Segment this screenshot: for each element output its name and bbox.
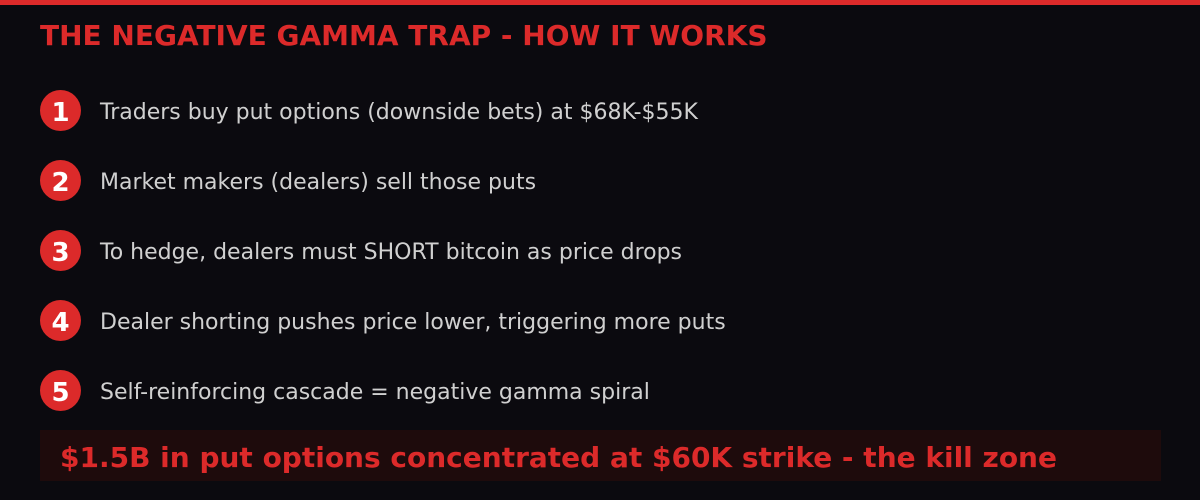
callout bbox=[40, 430, 1161, 481]
step 4: 4 bbox=[51, 308, 70, 338]
step 2 bbox=[40, 160, 536, 201]
title: THE NEGATIVE GAMMA TRAP - HOW IT WORKS bbox=[40, 19, 768, 52]
step 1: 1 bbox=[51, 98, 70, 128]
step 2: Market makers (dealers) sell those puts bbox=[100, 170, 536, 195]
callout: $1.5B in put options concentrated at $60K strike - the kill zone bbox=[60, 441, 1057, 474]
step 3 bbox=[40, 230, 682, 271]
step 5: 5 bbox=[51, 378, 70, 408]
step 1: Traders buy put options (downside bets) at $68K-$55K bbox=[100, 100, 698, 125]
step 4: Dealer shorting pushes price lower, triggering more puts bbox=[100, 310, 726, 335]
step 5: Self-reinforcing cascade = negative gamma spiral bbox=[100, 380, 650, 405]
step 2: 2 bbox=[51, 168, 70, 198]
step 4 bbox=[40, 300, 726, 341]
step 3: 3 bbox=[51, 238, 70, 268]
step 1 bbox=[40, 90, 698, 131]
step 5 bbox=[40, 370, 650, 411]
step 3: To hedge, dealers must SHORT bitcoin as price drops bbox=[100, 240, 682, 265]
